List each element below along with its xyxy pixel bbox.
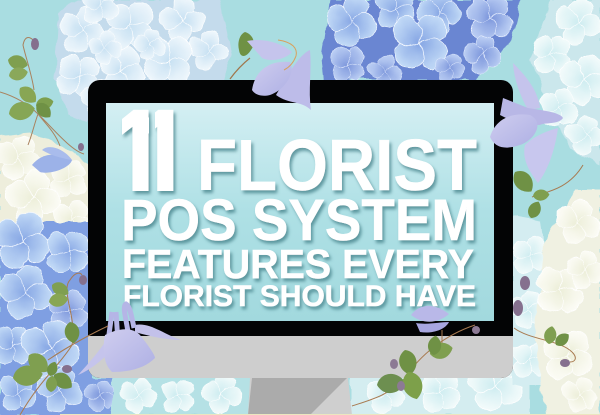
vine: upper left with leaves xyxy=(0,37,84,154)
columbine flower: top xyxy=(247,40,311,110)
vine: lower left with leaves xyxy=(12,273,108,415)
title number: 11 xyxy=(106,81,191,238)
title line 3: FEATURES EVERY xyxy=(122,241,474,287)
vine: top leaf by monitor xyxy=(230,32,254,79)
columbine flower: bottom right small xyxy=(411,306,449,333)
monitor xyxy=(88,80,513,415)
hydrangea: pale blue top left xyxy=(45,0,232,125)
monitor screen xyxy=(106,103,494,321)
title line 1: FLORIST xyxy=(197,126,477,206)
vine: right side with leaves xyxy=(509,165,583,367)
hydrangea: aqua bottom centre right xyxy=(350,350,530,415)
hydrangea: blue lower left xyxy=(0,201,125,415)
columbine flower: bottom xyxy=(78,304,181,375)
columbine flower: small left xyxy=(32,147,72,173)
hydrangea: cream left xyxy=(0,128,99,247)
hydrangea: periwinkle top centre xyxy=(320,0,523,92)
monitor chin xyxy=(88,336,513,378)
monitor stand xyxy=(248,378,352,415)
hydrangea: pale aqua top right xyxy=(522,0,600,165)
title line 4: FLORIST SHOULD HAVE xyxy=(123,280,476,313)
title xyxy=(122,110,480,312)
monitor body xyxy=(88,80,513,378)
title line 2: POS SYSTEM xyxy=(121,188,477,253)
columbine flower: right xyxy=(490,63,563,183)
vine: bottom centre with leaves xyxy=(352,325,480,406)
hydrangea: aqua right xyxy=(503,215,557,387)
bottom edge strip xyxy=(60,414,600,415)
hydrangea: aqua bottom centre left xyxy=(112,371,250,415)
hydrangea: cream right xyxy=(524,190,600,415)
